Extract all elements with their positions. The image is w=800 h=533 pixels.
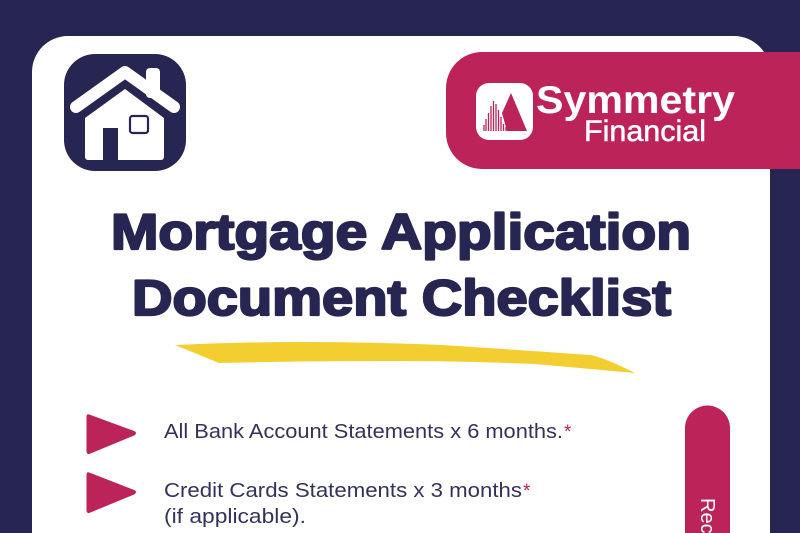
item text: condition: (if applicable). [164, 505, 306, 528]
item text: Credit Cards Statements x 3 months [164, 479, 522, 502]
checklist item: credit card statements [87, 473, 531, 528]
yellow brush underline [175, 342, 635, 373]
icon: house [64, 54, 186, 171]
title: Document Checklist [132, 270, 671, 326]
tab label: Rec [696, 498, 718, 533]
brand name: Symmetry [536, 79, 735, 122]
asterisk: * [523, 481, 531, 502]
asterisk: * [564, 422, 572, 443]
icon: Symmetry logo mark [476, 83, 533, 140]
item text: All Bank Account Statements x 6 months. [164, 420, 563, 443]
panel: brand banner [446, 52, 800, 169]
checklist item: bank statements [87, 415, 572, 454]
vertical side tab [685, 406, 730, 533]
icon: arrow bullet [87, 415, 136, 454]
brand subtitle: Financial [584, 115, 706, 148]
icon: arrow bullet [87, 473, 136, 513]
title: Mortgage Application [111, 204, 691, 260]
title [111, 204, 691, 326]
